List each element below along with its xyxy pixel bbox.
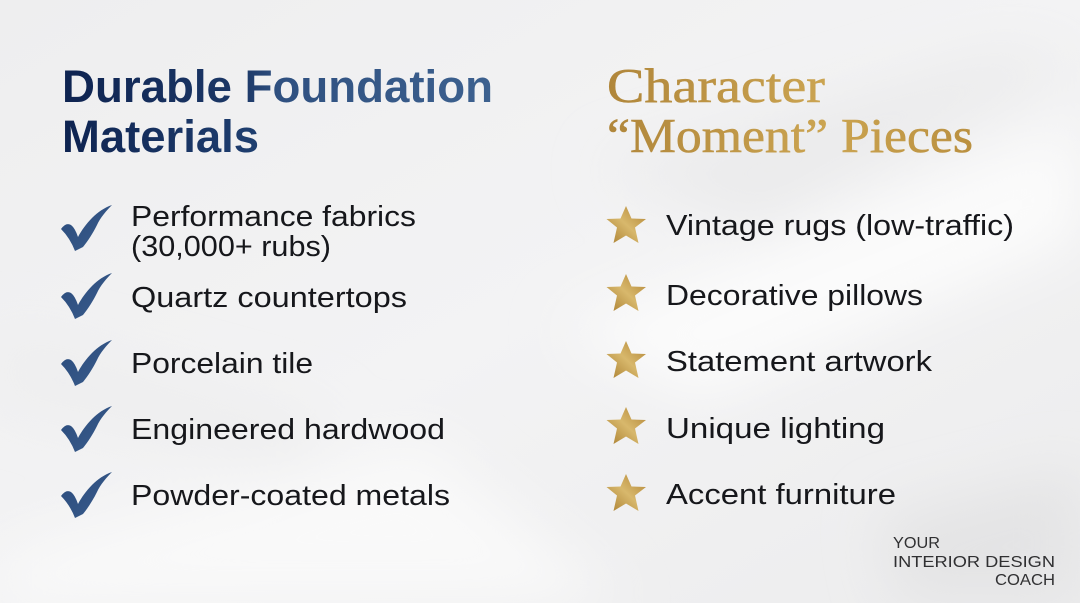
icon: check mark 3 (61, 340, 112, 386)
heading: Durable Foundation Materials: Materials (62, 111, 259, 162)
logo: your interior design coach: INTERIOR DESIGN (893, 554, 1055, 571)
icon: star 2 (606, 274, 646, 311)
list item: porcelain tile: Porcelain tile (131, 348, 313, 380)
list item: unique lighting: Unique lighting (666, 413, 885, 445)
list item: performance fabrics (131, 201, 416, 263)
icon: star 1 (606, 206, 646, 243)
heading: Character "Moment" Pieces: “Moment” Pieces (607, 108, 973, 163)
list item: quartz countertops: Quartz countertops (131, 282, 407, 314)
list item: engineered hardwood: Engineered hardwood (131, 414, 445, 446)
icon: check mark 5 (61, 472, 112, 518)
list item: accent furniture: Accent furniture (666, 479, 896, 511)
heading: Character "Moment" Pieces (607, 58, 973, 163)
list item: statement artwork: Statement artwork (666, 346, 933, 378)
heading: Character "Moment" Pieces: Character (607, 58, 825, 113)
logo: your interior design coach: COACH (995, 572, 1055, 589)
icon: star 4 (606, 407, 646, 444)
icon: star 5 (606, 474, 646, 511)
icon: check mark 1 (61, 205, 112, 251)
panel: durable foundation materials (61, 61, 493, 518)
heading: Durable Foundation Materials (62, 61, 493, 162)
list item: vintage rugs: Vintage rugs (low-traffic) (666, 210, 1014, 242)
list item: powder-coated metals: Powder-coated metals (131, 480, 450, 512)
icon: check mark 2 (61, 273, 112, 319)
list item: decorative pillows: Decorative pillows (666, 280, 923, 312)
panel: character moment pieces (606, 58, 1014, 511)
icon: check mark 4 (61, 406, 112, 452)
list item: performance fabrics: Performance fabrics (131, 201, 416, 233)
logo: your interior design coach: YOUR (893, 535, 940, 552)
icon: star 3 (606, 341, 646, 378)
list item: performance fabrics: (30,000+ rubs) (131, 231, 331, 263)
heading: Durable Foundation Materials: Durable Foundation (62, 61, 493, 112)
logo: your interior design coach (893, 535, 1055, 589)
